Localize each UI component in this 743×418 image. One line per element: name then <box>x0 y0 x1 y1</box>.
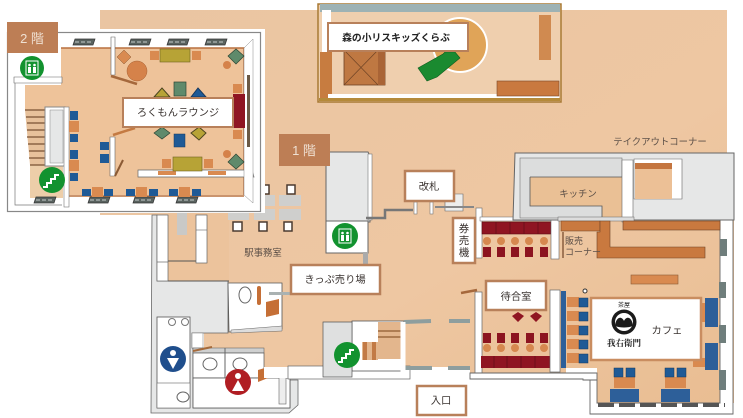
1st floor tag <box>279 134 330 166</box>
panel: kids room <box>318 4 561 102</box>
cafe furniture <box>567 282 726 405</box>
label: ticket office: きっぷ売り場 <box>304 273 366 286</box>
icon: elevator first floor <box>332 223 358 249</box>
kitchen <box>513 153 734 284</box>
label: ticket gate: 改札 <box>419 180 439 193</box>
label: ticket gate <box>405 171 454 201</box>
2nd floor tag <box>7 22 58 53</box>
icon: men restroom <box>160 346 186 372</box>
label: lounge: ろくもんラウンジ <box>137 107 219 119</box>
label: cafe <box>591 298 701 360</box>
label: ticket machine: 機 <box>459 246 470 259</box>
icon: women restroom <box>225 369 251 395</box>
floor area <box>25 48 244 195</box>
ticket gate wall <box>326 152 474 265</box>
top windows <box>34 39 227 203</box>
text: sales corner: コーナー <box>565 247 601 257</box>
label: ticket machine: 券 <box>459 222 470 235</box>
label: ticket machine <box>453 218 475 263</box>
walls <box>14 37 254 205</box>
label: cafe: カフェ <box>652 325 682 337</box>
label: entrance: 入口 <box>431 396 451 407</box>
label: waiting room <box>486 281 546 310</box>
bottom wall <box>470 220 733 414</box>
label: kids club: 森の小リスキッズくらぶ <box>342 31 450 44</box>
restrooms <box>157 317 290 408</box>
label: ticket machine: 売 <box>459 234 469 247</box>
panel: second floor <box>7 29 265 213</box>
label: cafe: 我右衛門 <box>607 338 641 348</box>
label: entrance <box>417 386 466 415</box>
left service area <box>151 213 298 413</box>
2nd floor tag: 2 階 <box>20 31 44 46</box>
icon: stairs first floor <box>334 342 360 368</box>
label: cafe: 茶屋 <box>618 301 630 309</box>
text: kitchen: キッチン <box>559 188 597 199</box>
label: lounge <box>123 98 233 127</box>
label: waiting room: 待合室 <box>501 290 531 303</box>
counter <box>497 81 559 96</box>
stairs <box>25 107 69 207</box>
office floor <box>168 212 229 282</box>
text: station office: 駅事務室 <box>244 247 282 258</box>
bench rows <box>476 208 560 259</box>
small restroom <box>228 283 291 333</box>
office tables <box>228 185 301 231</box>
icon: cafe crest <box>612 310 636 334</box>
stairs first floor <box>288 321 470 379</box>
1st floor tag: 1 階 <box>292 143 316 158</box>
icon: stairs second floor <box>39 167 65 193</box>
round mat <box>433 18 487 72</box>
play box <box>344 50 385 85</box>
waiting room benches <box>461 290 566 373</box>
text: takeout corner: テイクアウトコーナー <box>613 136 707 147</box>
label: kids club <box>328 23 468 51</box>
label: ticket office <box>291 265 380 294</box>
icon: elevator second floor <box>20 56 44 80</box>
lounge furniture <box>69 49 244 197</box>
panel: first floor <box>151 152 734 414</box>
icon: green slide <box>418 52 460 81</box>
text: sales corner: 販売 <box>565 235 583 246</box>
